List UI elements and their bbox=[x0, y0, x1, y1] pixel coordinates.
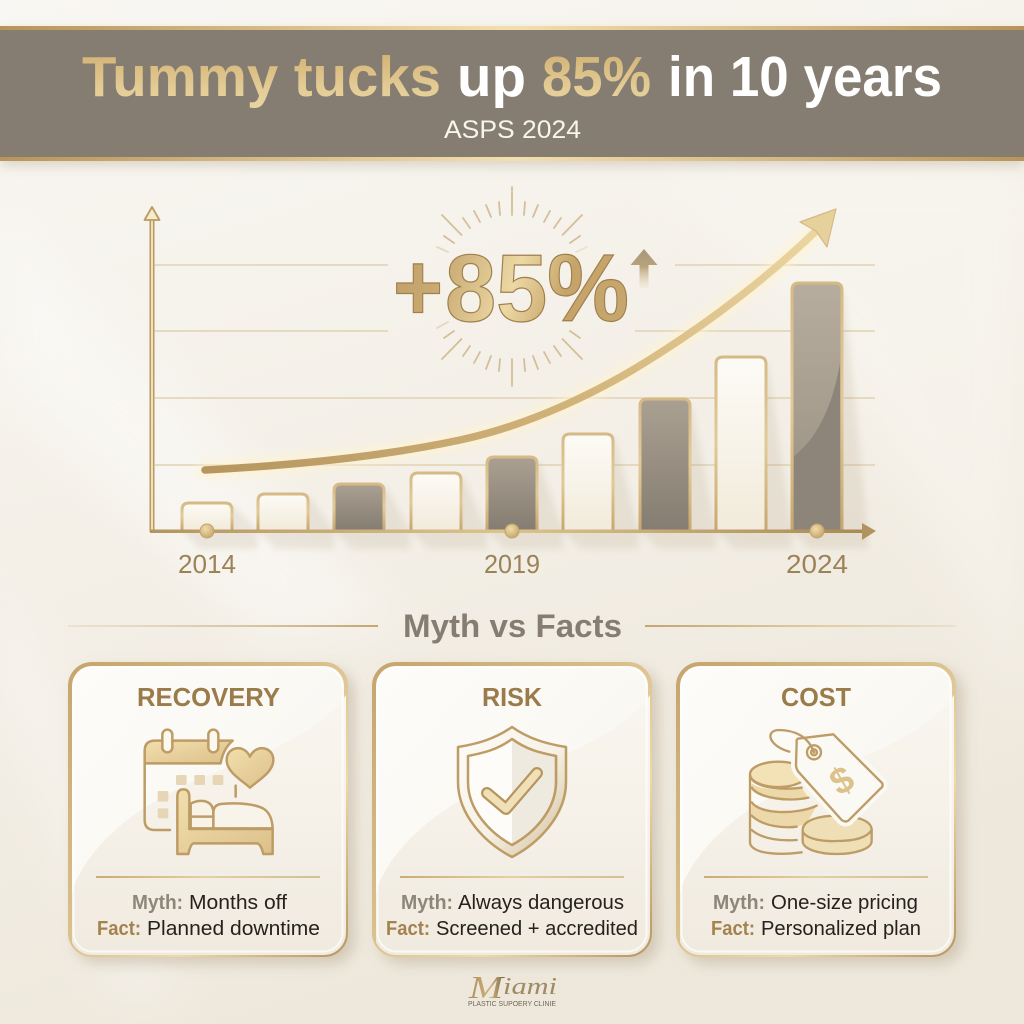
heading: RISK bbox=[482, 682, 542, 712]
bar 2018 bbox=[487, 457, 537, 530]
title: up bbox=[457, 45, 526, 109]
myth line: One-size pricing bbox=[771, 892, 918, 914]
myth line bbox=[132, 892, 287, 914]
bar 2020 bbox=[563, 434, 613, 530]
panel: cost bbox=[678, 664, 956, 957]
panel: risk bbox=[374, 664, 652, 957]
heading: COST bbox=[781, 682, 851, 712]
fact line: Personalized plan bbox=[761, 918, 921, 940]
icon: dollar sign: $ bbox=[823, 757, 861, 803]
y axis arrow bbox=[144, 207, 160, 532]
logo: clinic: M bbox=[468, 969, 506, 1005]
header band bbox=[0, 26, 1024, 161]
title: Tummy tucks bbox=[82, 45, 441, 109]
logo: clinic bbox=[468, 969, 557, 1008]
section heading: Myth vs Facts: Myth vs Facts bbox=[403, 608, 622, 644]
title: in 10 years bbox=[668, 45, 942, 109]
logo: clinic: iami bbox=[503, 974, 557, 1000]
big stat: +85%: + bbox=[393, 234, 443, 341]
axis markers bbox=[200, 524, 824, 538]
icon: up arrow bbox=[630, 249, 658, 288]
bar 2022 bbox=[716, 357, 766, 530]
logo: clinic: PLASTIC SUPOERY CLINIE bbox=[468, 1001, 556, 1008]
myth line: Myth: bbox=[401, 892, 453, 914]
sunburst bbox=[437, 187, 587, 386]
bar chart bbox=[144, 207, 876, 549]
myth line: Myth: bbox=[132, 892, 183, 914]
fact line: Planned downtime bbox=[147, 918, 320, 940]
year labels bbox=[178, 549, 848, 579]
icon: calendar, heart and bed bbox=[145, 730, 273, 854]
year labels: 2019 bbox=[484, 549, 540, 579]
myth line: Always dangerous bbox=[458, 892, 624, 914]
bar 2021 bbox=[640, 399, 690, 530]
fact line: Fact: bbox=[97, 918, 141, 940]
big stat: +85%: 85% bbox=[445, 235, 629, 342]
bar 2015 bbox=[258, 494, 308, 530]
myth line: Myth: bbox=[713, 892, 765, 914]
fact line: Fact: bbox=[711, 918, 755, 940]
bar 2016 bbox=[334, 484, 384, 530]
year labels: 2024 bbox=[786, 549, 848, 579]
x axis arrow bbox=[150, 523, 876, 540]
heading: RECOVERY bbox=[137, 682, 280, 712]
title bbox=[82, 45, 942, 109]
fact line: Screened + accredited bbox=[436, 918, 638, 940]
icon: shield with check bbox=[458, 727, 566, 857]
year labels: 2014 bbox=[178, 549, 236, 579]
bar 2024 bbox=[792, 283, 842, 530]
myth line: Months off bbox=[189, 892, 287, 914]
icon: coins and price tag bbox=[750, 730, 883, 854]
title: 85% bbox=[542, 45, 651, 109]
bar 2014 bbox=[182, 503, 232, 530]
subtitle: source: ASPS 2024 bbox=[444, 116, 581, 144]
growth curve arrow bbox=[205, 209, 836, 470]
panel: recovery bbox=[70, 664, 348, 957]
bar 2017 bbox=[411, 473, 461, 530]
fact line: Fact: bbox=[386, 918, 430, 940]
